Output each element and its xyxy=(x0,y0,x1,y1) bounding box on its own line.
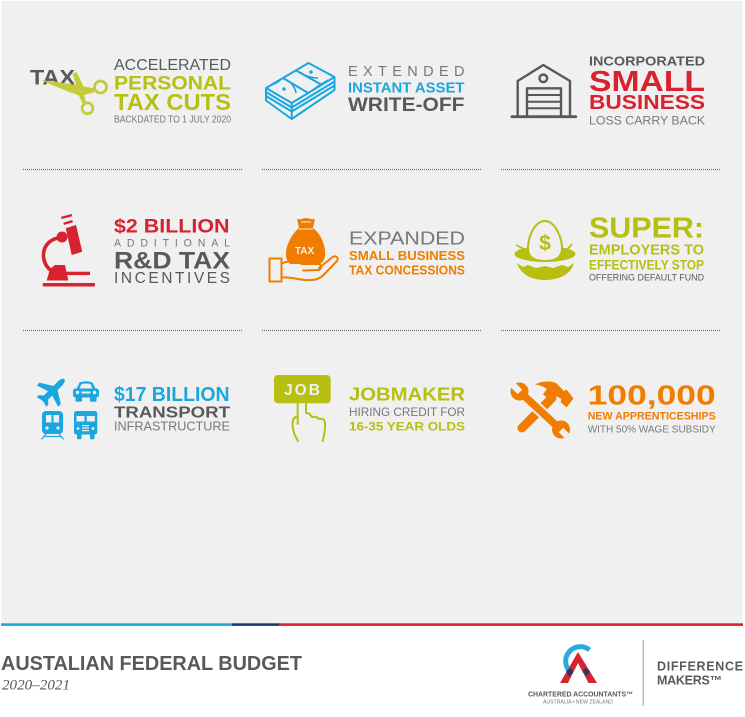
text block: expanded small business tax concessions: TAX CONCESSIONS xyxy=(349,263,465,278)
icon: job sign with pointing hand xyxy=(274,375,331,441)
text block: $2 billion additional r&d tax incentives: $2 BILLION xyxy=(114,216,230,238)
panel: super xyxy=(514,213,704,282)
text block: accelerated personal tax cuts: TAX CUTS xyxy=(114,89,231,115)
icon: crossed hammer and wrench xyxy=(509,381,574,441)
panel: apprenticeships xyxy=(509,379,716,441)
text block: $17 billion transport infrastructure: INFRASTRUCTURE xyxy=(114,420,230,434)
text block: extended instant asset write-off: EXTENDED xyxy=(348,64,464,80)
panel: personal tax cuts xyxy=(30,57,232,126)
text block: $2 billion additional r&d tax incentives: ADDITIONAL xyxy=(114,237,230,249)
text block: extended instant asset write-off: WRITE-OFF xyxy=(348,95,464,116)
text block: $17 billion transport infrastructure xyxy=(114,384,230,434)
text block: super employers to effectively stop offering default fund: EMPLOYERS TO xyxy=(589,241,704,258)
text block: incorporated small business loss carry back: BUSINESS xyxy=(589,92,705,114)
text block: jobmaker hiring credit for 16-35 year olds: 16-35 YEAR OLDS xyxy=(349,420,465,434)
text block: $2 billion additional r&d tax incentives xyxy=(114,216,230,287)
text block: super employers to effectively stop offering default fund xyxy=(589,213,704,282)
text block: incorporated small business loss carry back: SMALL xyxy=(589,66,705,98)
panel: incorporated small business xyxy=(512,54,705,127)
text block: super employers to effectively stop offering default fund: OFFERING DEFAULT FUND xyxy=(589,272,704,282)
text block: accelerated personal tax cuts: BACKDATED TO 1 JULY 2020 xyxy=(114,115,232,126)
panel: instant asset write-off xyxy=(266,63,465,119)
text block: accelerated personal tax cuts xyxy=(114,57,232,126)
icon: job sign with pointing hand: JOB xyxy=(284,382,320,399)
panel: transport infrastructure xyxy=(31,368,230,439)
panel: jobmaker xyxy=(274,375,465,441)
text block: $2 billion additional r&d tax incentives: INCENTIVES xyxy=(114,270,230,287)
text block: jobmaker hiring credit for 16-35 year olds: JOBMAKER xyxy=(349,384,465,405)
tagline: difference makers xyxy=(657,660,743,687)
text block: expanded small business tax concessions: EXPANDED xyxy=(349,228,465,249)
panel: r&d tax incentives xyxy=(43,214,230,287)
text block: 100,000 new apprenticeships: NEW APPRENTICESHIPS xyxy=(588,410,716,422)
text block: incorporated small business loss carry back: INCORPORATED xyxy=(589,54,705,68)
panel: small business tax concessions xyxy=(270,218,465,282)
icon: garage xyxy=(512,65,576,117)
text block: $2 billion additional r&d tax incentives: R&D TAX xyxy=(114,247,230,274)
tagline: difference makers: DIFFERENCE xyxy=(657,660,743,674)
text block: $17 billion transport infrastructure: $17 BILLION xyxy=(114,384,230,406)
text block: expanded small business tax concessions: SMALL BUSINESS xyxy=(349,248,465,263)
text block: incorporated small business loss carry back: LOSS CARRY BACK xyxy=(589,113,705,127)
text block: 100,000 new apprenticeships: 100,000 xyxy=(588,379,716,410)
text block: extended instant asset write-off: INSTANT ASSET xyxy=(348,81,465,97)
text block: jobmaker hiring credit for 16-35 year olds: HIRING CREDIT FOR xyxy=(349,405,465,419)
text block: extended instant asset write-off xyxy=(348,64,465,116)
logo: chartered accountants xyxy=(528,647,633,706)
text block: accelerated personal tax cuts: ACCELERATED xyxy=(114,57,231,74)
text block: expanded small business tax concessions xyxy=(349,228,465,278)
icon: stack of banknotes xyxy=(266,63,334,119)
icon: scissors cutting tax: TAX xyxy=(30,67,75,90)
text block: super employers to effectively stop offering default fund: SUPER: xyxy=(589,213,704,245)
text block: $17 billion transport infrastructure: TRANSPORT xyxy=(114,405,230,422)
icon: nest egg: $ xyxy=(539,232,551,255)
icon: microscope xyxy=(43,214,95,286)
tagline: difference makers: MAKERS™ xyxy=(657,673,722,687)
footer title xyxy=(1,653,302,693)
text block: jobmaker hiring credit for 16-35 year olds xyxy=(349,384,465,434)
text block: incorporated small business loss carry back xyxy=(589,54,705,127)
icon: tax money bag on hand xyxy=(270,218,338,282)
logo: chartered accountants: AUSTRALIA • NEW ZEALAND xyxy=(543,700,613,706)
logo: chartered accountants: CHARTERED ACCOUNTANTS™ xyxy=(528,692,633,699)
text block: 100,000 new apprenticeships xyxy=(588,379,716,435)
text block: 100,000 new apprenticeships: WITH 50% WAGE SUBSIDY xyxy=(588,423,716,435)
footer title: 2020–2021 xyxy=(2,677,70,693)
text block: accelerated personal tax cuts: PERSONAL xyxy=(114,72,231,94)
footer title: AUSTALIAN FEDERAL BUDGET xyxy=(1,653,302,675)
icon: nest egg xyxy=(514,221,576,280)
icon: scissors cutting tax xyxy=(30,67,106,114)
icon: tax money bag on hand: TAX xyxy=(295,246,314,257)
text block: super employers to effectively stop offering default fund: EFFECTIVELY STOP xyxy=(589,257,704,272)
icon: plane, car, train and bus xyxy=(31,368,99,439)
